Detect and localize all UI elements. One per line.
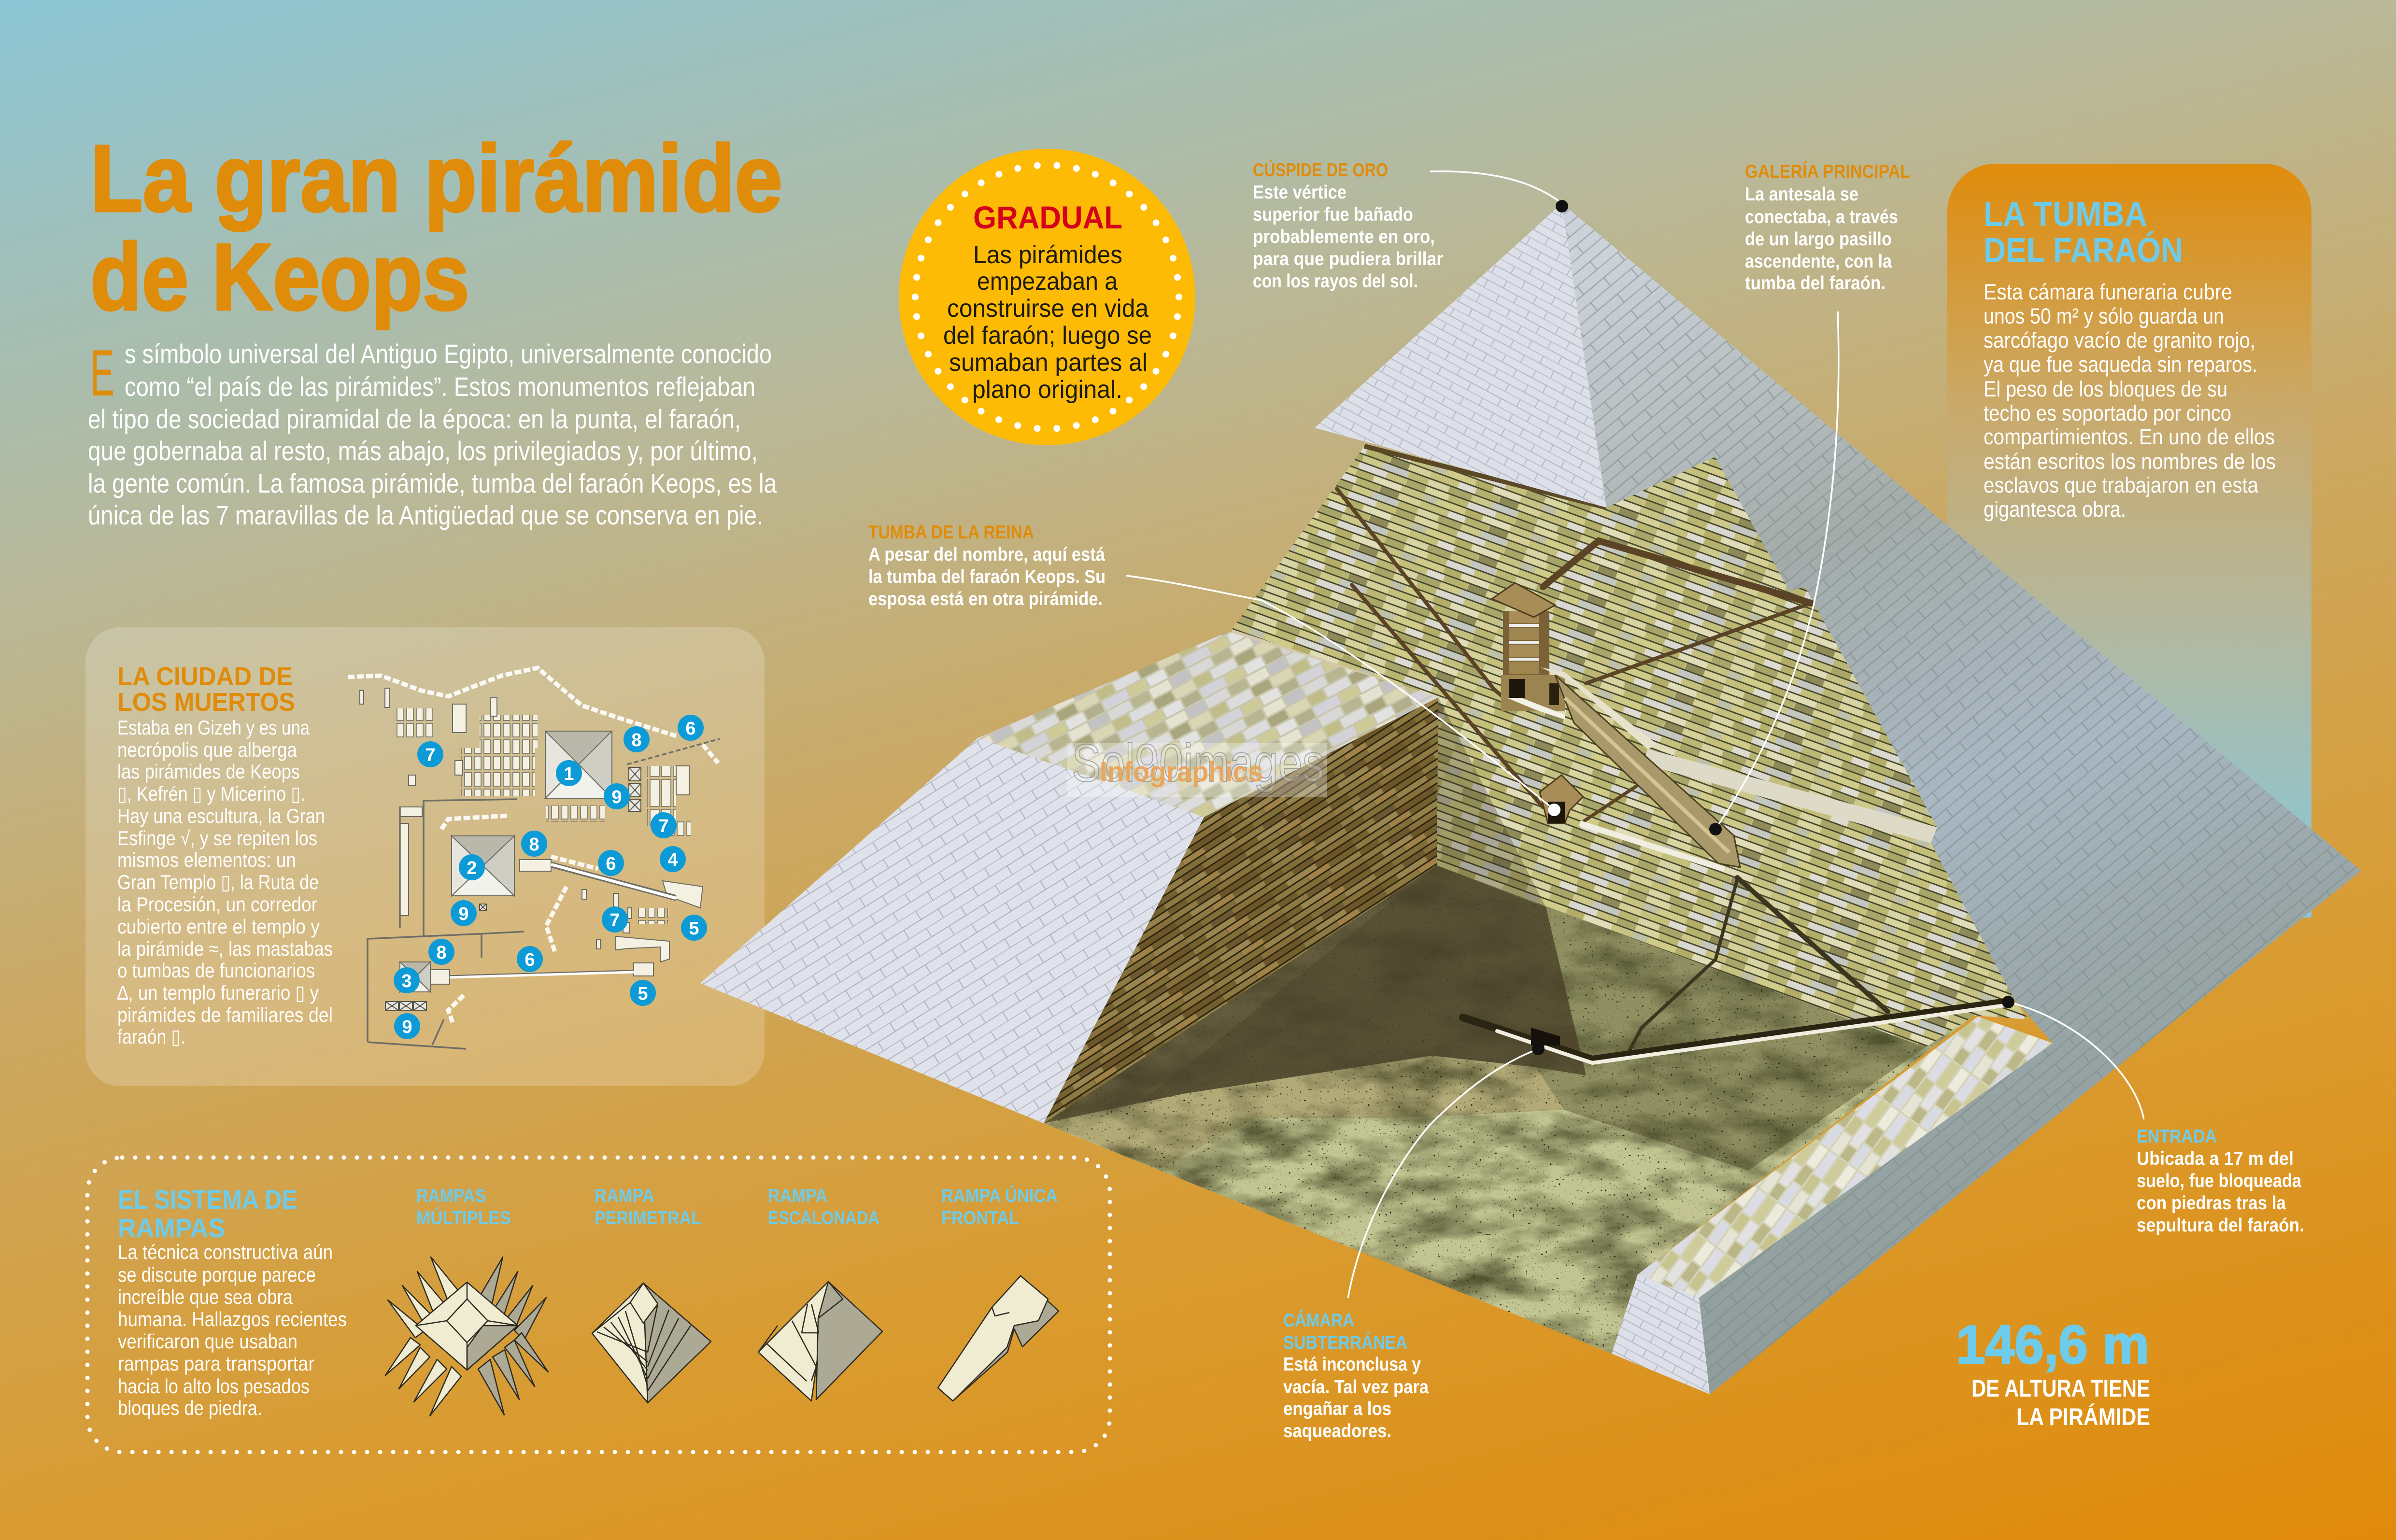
map of Giza: 9 bbox=[458, 904, 469, 924]
intro paragraph: única de las 7 maravillas de la Antigüedad que se conserva en pie. bbox=[88, 500, 763, 530]
callout: cámara subterránea: engañar a los bbox=[1283, 1399, 1391, 1419]
panel: la ciudad de los muertos bbox=[85, 627, 765, 1086]
callout: cámara subterránea: CÁMARA bbox=[1283, 1310, 1354, 1331]
body text: se discute porque parece bbox=[118, 1263, 316, 1286]
intro paragraph: el tipo de sociedad piramidal de la época: en la punta, el faraón, bbox=[88, 404, 741, 434]
panel text: la tumba del faraón: DEL FARAÓN bbox=[1984, 231, 2183, 270]
panel text: la tumba del faraón: unos 50 m² y sólo guarda un bbox=[1984, 304, 2224, 328]
map of Giza: 6 bbox=[606, 854, 616, 874]
body text: rampas para transportar bbox=[118, 1352, 314, 1375]
callout: gradual: sumaban partes al bbox=[949, 349, 1148, 377]
title: La gran pirámide bbox=[90, 126, 782, 231]
panel text: la tumba del faraón: compartimientos. En uno de ellos bbox=[1984, 424, 2275, 449]
capstone left face bbox=[1315, 203, 1606, 508]
large grey right face bbox=[1562, 203, 2361, 1394]
ramp labels: RAMPA ÚNICA bbox=[941, 1185, 1058, 1206]
intro paragraph: como “el país de las pirámides”. Estos monumentos reflejaban bbox=[125, 371, 755, 402]
callout: cámara subterránea bbox=[1283, 1310, 1429, 1441]
panel heading: LA CIUDAD DE bbox=[117, 662, 293, 691]
panel body text: mismos elementos: un bbox=[117, 848, 296, 871]
map of Giza: 2 bbox=[467, 858, 477, 878]
body text: verificaron que usaban bbox=[118, 1330, 298, 1353]
body text bbox=[118, 1241, 347, 1419]
callout: entrada: suelo, fue bloqueada bbox=[2137, 1171, 2301, 1191]
heading: EL SISTEMA DE bbox=[118, 1184, 298, 1215]
callout: galería principal: GALERÍA PRINCIPAL bbox=[1745, 161, 1910, 182]
body text: humana. Hallazgos recientes bbox=[118, 1308, 347, 1330]
panel body text: o tumbas de funcionarios bbox=[117, 959, 315, 982]
panel text: la tumba del faraón: están escritos los nombres de los bbox=[1984, 449, 2276, 474]
map of Giza: 9 bbox=[402, 1017, 412, 1037]
diagram: rampa escalonada bbox=[758, 1282, 882, 1401]
callout: gradual: Las pirámides bbox=[973, 241, 1122, 269]
queen's chamber bbox=[1540, 775, 1583, 823]
map of Giza: 8 bbox=[631, 730, 642, 750]
map of Giza bbox=[348, 668, 720, 1049]
panel: el sistema de rampas bbox=[87, 1158, 1110, 1452]
panel heading: LOS MUERTOS bbox=[117, 688, 295, 717]
panel body text: las pirámides de Keops bbox=[117, 760, 300, 783]
floor sand bbox=[1044, 865, 1974, 1354]
callout: cúspide de oro: superior fue bañado bbox=[1253, 204, 1413, 225]
callout: entrada: sepultura del faraón. bbox=[2137, 1215, 2304, 1236]
front wall top strip bbox=[1638, 1017, 2053, 1298]
underground chamber bbox=[1531, 1028, 1560, 1046]
map of Giza: 1 bbox=[564, 764, 574, 784]
panel heading bbox=[117, 662, 295, 717]
callout: gradual bbox=[899, 149, 1195, 445]
panel body text: la pirámide ≈, las mastabas bbox=[117, 937, 333, 960]
ramp labels bbox=[416, 1185, 1058, 1229]
callout: gradual: empezaban a bbox=[977, 268, 1118, 296]
callout: gradual: construirse en vida bbox=[947, 295, 1148, 323]
callout: gradual: plano original. bbox=[972, 376, 1122, 404]
panel text: la tumba del faraón: Esta cámara funeraria cubre bbox=[1984, 280, 2232, 304]
callout: cámara subterránea: Está inconclusa y bbox=[1283, 1354, 1421, 1375]
left wing top surface bbox=[978, 632, 1438, 817]
intro paragraph: E bbox=[90, 336, 114, 410]
ramp labels: PERIMETRAL bbox=[595, 1208, 701, 1229]
watermark: Sol90images bbox=[1072, 734, 1324, 793]
callout: entrada: con piedras tras la bbox=[2137, 1193, 2286, 1214]
callout: gradual: GRADUAL bbox=[973, 199, 1122, 235]
map of Giza: 7 bbox=[425, 745, 436, 765]
height figure bbox=[1956, 1314, 2150, 1430]
panel: la tumba del faraón background bbox=[1947, 164, 2311, 918]
callout: entrada bbox=[2137, 1126, 2304, 1236]
height figure: 146,6 m bbox=[1956, 1314, 2149, 1375]
ledges bbox=[1642, 749, 1937, 843]
map of Giza: 5 bbox=[689, 918, 699, 939]
map of Giza: 7 bbox=[610, 910, 620, 931]
callout: cúspide de oro: con los rayos del sol. bbox=[1253, 271, 1418, 292]
callout: cámara subterránea: vacía. Tal vez para bbox=[1283, 1377, 1429, 1398]
map of Giza: 4 bbox=[667, 850, 678, 870]
grand gallery bbox=[1541, 667, 1740, 867]
ramp labels: ESCALONADA bbox=[768, 1208, 879, 1229]
interior shafts bbox=[1337, 489, 1811, 821]
shadowed left wall bbox=[1044, 697, 1438, 1123]
diagram: rampas múltiples bbox=[385, 1257, 548, 1416]
body text: La técnica constructiva aún bbox=[118, 1241, 333, 1263]
height figure: DE ALTURA TIENE bbox=[1971, 1375, 2150, 1402]
callout: galería principal: ascendente, con la bbox=[1745, 251, 1892, 272]
panel body text: ∆, un templo funerario ▯ y bbox=[117, 981, 319, 1004]
king's chamber stack bbox=[1492, 583, 1565, 720]
title: de Keops bbox=[90, 224, 469, 330]
map of Giza: 6 bbox=[525, 950, 535, 970]
diagram: rampa única frontal bbox=[938, 1276, 1059, 1401]
callout: cámara subterránea: saqueadores. bbox=[1283, 1421, 1391, 1441]
map of Giza: 8 bbox=[436, 943, 447, 963]
panel body text: necrópolis que alberga bbox=[117, 738, 298, 761]
callout: galería principal: tumba del faraón. bbox=[1745, 273, 1886, 294]
callout: galería principal bbox=[1745, 161, 1910, 294]
panel body text: Esfinge √, y se repiten los bbox=[117, 827, 317, 849]
callout: galería principal: de un largo pasillo bbox=[1745, 229, 1892, 250]
callout: tumba de la reina: TUMBA DE LA REINA bbox=[868, 522, 1034, 543]
panel body text bbox=[117, 716, 333, 1048]
ramp labels: RAMPA bbox=[595, 1186, 654, 1206]
panel text: la tumba del faraón bbox=[1984, 195, 2276, 522]
back brick wall bbox=[1232, 446, 2028, 1047]
heading bbox=[118, 1184, 298, 1243]
panel body text: ▯, Kefrén ▯ y Micerino ▯. bbox=[117, 782, 305, 805]
callout: cúspide de oro bbox=[1253, 159, 1443, 292]
dotted frame bbox=[87, 1158, 1110, 1452]
ramp labels: FRONTAL bbox=[941, 1208, 1019, 1229]
ramp labels: MÚLTIPLES bbox=[416, 1207, 511, 1229]
front corner white face bbox=[1612, 1274, 1710, 1394]
intro paragraph: la gente común. La famosa pirámide, tumba del faraón Keops, es la bbox=[88, 468, 777, 498]
map of Giza: 7 bbox=[658, 816, 669, 836]
callout: galería principal: conectaba, a través bbox=[1745, 207, 1898, 227]
callout: cúspide de oro: CÚSPIDE DE ORO bbox=[1253, 159, 1388, 181]
ramp labels: RAMPA bbox=[768, 1186, 827, 1206]
ramp labels: RAMPAS bbox=[416, 1186, 486, 1206]
horizontal passage bbox=[1580, 823, 1725, 869]
panel text: la tumba del faraón: gigantesca obra. bbox=[1984, 497, 2126, 522]
panel body text: faraón ▯. bbox=[117, 1025, 185, 1048]
panel background bbox=[85, 627, 765, 1086]
map of Giza: 5 bbox=[638, 984, 648, 1004]
map of Giza: 3 bbox=[401, 971, 412, 991]
panel body text: pirámides de familiares del bbox=[117, 1003, 333, 1026]
callout: cúspide de oro: para que pudiera brillar bbox=[1253, 249, 1443, 269]
callout: tumba de la reina: esposa está en otra pirámide. bbox=[868, 589, 1103, 609]
panel text: la tumba del faraón: ya que fue saqueda sin reparos. bbox=[1984, 352, 2257, 377]
intro paragraph: que gobernaba al resto, más abajo, los privilegiados y, por último, bbox=[88, 436, 758, 466]
title bbox=[90, 126, 782, 330]
intro paragraph: s símbolo universal del Antiguo Egipto, universalmente conocido bbox=[125, 339, 772, 369]
intro paragraph bbox=[88, 336, 777, 530]
numbered map markers bbox=[394, 715, 707, 1039]
panel body text: la Procesión, un corredor bbox=[117, 893, 317, 916]
pyramid cutaway illustration bbox=[700, 203, 2361, 1394]
descending passages bbox=[1463, 877, 2008, 1063]
callout: tumba de la reina: A pesar del nombre, aquí está bbox=[868, 544, 1105, 565]
panel body text: cubierto entre el templo y bbox=[117, 915, 320, 938]
callout: cúspide de oro: probablemente en oro, bbox=[1253, 226, 1435, 247]
body text: increíble que sea obra bbox=[118, 1286, 293, 1308]
watermark: Infographics bbox=[1100, 756, 1263, 788]
callout: tumba de la reina: la tumba del faraón Keops. Su bbox=[868, 566, 1106, 587]
left white face bbox=[700, 738, 1204, 1123]
callout: cámara subterránea: SUBTERRÁNEA bbox=[1283, 1332, 1407, 1353]
body text: bloques de piedra. bbox=[118, 1397, 262, 1419]
callout: tumba de la reina bbox=[868, 522, 1106, 609]
callout: entrada: ENTRADA bbox=[2137, 1126, 2217, 1147]
map of Giza: 8 bbox=[529, 834, 539, 855]
heading: RAMPAS bbox=[118, 1213, 225, 1243]
height figure: LA PIRÁMIDE bbox=[2016, 1403, 2150, 1430]
panel body text: Hay una escultura, la Gran bbox=[117, 805, 325, 827]
panel text: la tumba del faraón: sarcófago vacío de granito rojo, bbox=[1984, 328, 2255, 353]
callout: cúspide de oro: Este vértice bbox=[1253, 182, 1347, 203]
body text: hacia lo alto los pesados bbox=[118, 1375, 310, 1398]
panel text: la tumba del faraón: techo es soportado por cinco bbox=[1984, 401, 2231, 425]
panel text: la tumba del faraón: El peso de los bloques de su bbox=[1984, 377, 2227, 401]
callout: gradual: del faraón; luego se bbox=[943, 322, 1152, 350]
panel body text: Estaba en Gizeh y es una bbox=[117, 716, 310, 739]
callout: galería principal: La antesala se bbox=[1745, 184, 1858, 205]
leader lines and dots bbox=[1126, 171, 2144, 1298]
diagram: rampa perimetral bbox=[592, 1283, 711, 1403]
panel text: la tumba del faraón: esclavos que trabajaron en esta bbox=[1984, 473, 2259, 497]
map of Giza: 9 bbox=[611, 787, 622, 807]
panel text: la tumba del faraón: LA TUMBA bbox=[1984, 195, 2147, 234]
map of Giza: 6 bbox=[685, 719, 696, 739]
callout: entrada: Ubicada a 17 m del bbox=[2137, 1148, 2294, 1169]
panel body text: Gran Templo ▯, la Ruta de bbox=[117, 871, 319, 893]
